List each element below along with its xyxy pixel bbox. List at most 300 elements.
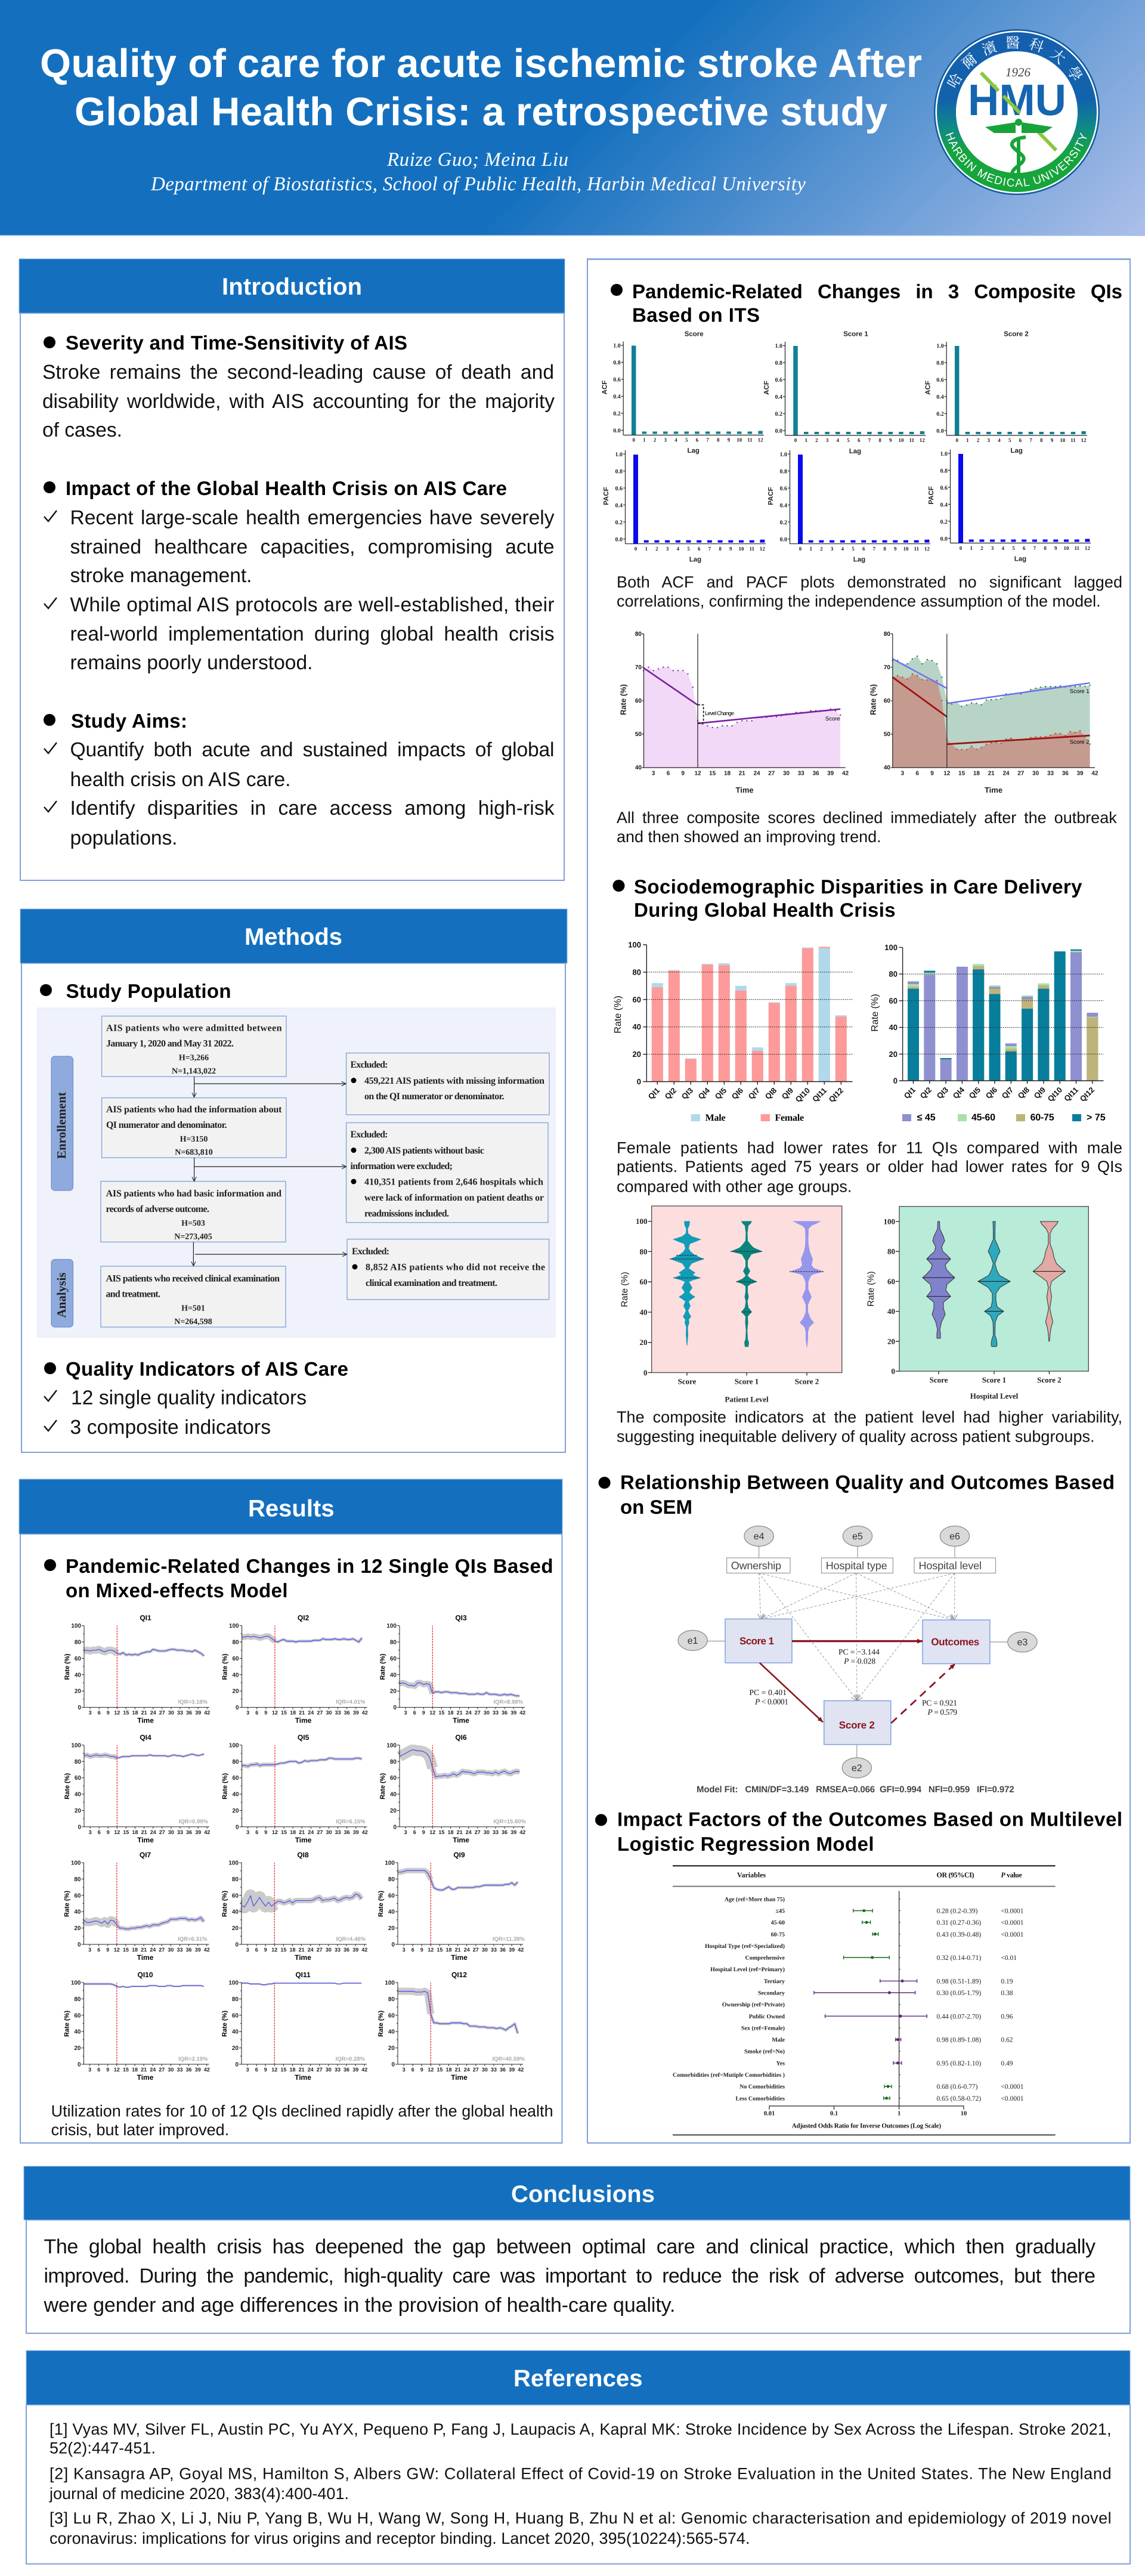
title: Global Health Crisis: a retrospective study bbox=[75, 89, 887, 134]
chart: QI10: 40 bbox=[74, 2029, 81, 2036]
caption: violin bbox=[617, 1408, 1122, 1446]
chart: ACF score 2: 12 bbox=[1081, 437, 1087, 443]
caption: ACF and PACF bbox=[617, 573, 1122, 610]
chart: ITS composite score: Time bbox=[736, 786, 754, 794]
chart: ITS score 1 and score 2: 15 bbox=[958, 771, 965, 777]
chart: QI5 bbox=[222, 1733, 368, 1844]
chart: ITS composite score: 80 bbox=[635, 631, 642, 638]
odds ratio values: 0.31 (0.27-0.36) bbox=[936, 1919, 981, 1926]
chart: QI6: 27 bbox=[475, 1829, 481, 1835]
violin chart: hospital level: Score bbox=[930, 1375, 948, 1384]
chart: QI8: 80 bbox=[232, 1876, 239, 1883]
heading: 12 single QIs: Pandemic-Related Changes in 12 Single QIs Based bbox=[66, 1555, 553, 1577]
flow box 1: H=3,266 bbox=[179, 1054, 209, 1063]
chart: QI8: 33 bbox=[335, 1947, 341, 1953]
path coefficients: P < 0.0001 bbox=[754, 1697, 788, 1706]
text block: references: 52(2):447-451. bbox=[49, 2439, 156, 2457]
chart: ITS score 1 and score 2: 42 bbox=[1091, 771, 1098, 777]
chart: QI2: 6 bbox=[255, 1710, 258, 1716]
chart: ACF score 2: 0.6 bbox=[936, 377, 944, 384]
chart: PACF score 1: 1.0 bbox=[780, 452, 787, 458]
chart: QI5: 80 bbox=[232, 1759, 239, 1765]
chart: PACF score 1: 10 bbox=[903, 546, 909, 552]
chart: ACF score 2: 10 bbox=[1060, 437, 1066, 443]
chart: QI7: 3 bbox=[88, 1947, 91, 1953]
chart: QI8: 27 bbox=[317, 1947, 323, 1953]
chart: QI7: 42 bbox=[204, 1947, 210, 1953]
chart: PACF score: 0.6 bbox=[615, 485, 623, 492]
chart: QI2: 42 bbox=[362, 1710, 368, 1716]
chart: QI9: 20 bbox=[388, 1925, 395, 1932]
chart: QI4: 12 bbox=[114, 1829, 120, 1835]
chart: ACF score 1: Lag bbox=[849, 448, 861, 455]
chart: QI2: 3 bbox=[246, 1710, 249, 1716]
chart: ACF score 1: 1 bbox=[804, 437, 807, 443]
exclusion box 2: 2,300 AIS patients without basic bbox=[364, 1146, 484, 1156]
chart: QI9: Time bbox=[451, 1953, 468, 1962]
violin chart: patient level: Rate (%) bbox=[620, 1272, 630, 1307]
text block: references: [2] Kansagra AP, Goyal MS, Hamilton S, Albers GW: Collateral Effect of Covid-19 on Stroke Evaluation in the United States. The New England bbox=[49, 2465, 1112, 2483]
chart: QI5: 6 bbox=[255, 1829, 258, 1835]
table header bbox=[737, 1870, 1022, 1879]
violin chart: patient level: 0 bbox=[643, 1368, 648, 1377]
chart: QI3: 24 bbox=[466, 1710, 472, 1716]
chart: QI6: 20 bbox=[390, 1808, 397, 1814]
chart: QI6: 12 bbox=[429, 1829, 435, 1835]
variable names: Male bbox=[772, 2037, 785, 2043]
caption: ITS bbox=[617, 809, 1117, 846]
chart: QI7: 12 bbox=[114, 1947, 120, 1953]
chart: QI8: Rate (%) bbox=[221, 1891, 228, 1917]
chart: ITS composite score: 40 bbox=[635, 765, 642, 771]
chart: QI9: 40 bbox=[388, 1909, 395, 1916]
caption: violin: suggesting inequitable delivery of quality across patient subgroups. bbox=[617, 1428, 1095, 1446]
text block: impact: remains poorly understood. bbox=[70, 652, 312, 674]
chart: ITS composite score: 42 bbox=[842, 771, 849, 777]
chart: QI4: 0 bbox=[78, 1824, 81, 1830]
forest axis: 0.01 bbox=[764, 2111, 775, 2117]
text block: severity: Stroke remains the second-leading cause of death and bbox=[42, 361, 554, 384]
chart: QI10: 3 bbox=[88, 2067, 91, 2073]
odds ratio values: 0.30 (0.05-1.79) bbox=[936, 1990, 981, 1997]
chart: QI8: 18 bbox=[289, 1947, 296, 1953]
text block: impact bbox=[44, 477, 555, 674]
exclusion box 2: 410,351 patients from 2,646 hospitals which bbox=[364, 1177, 543, 1188]
icon: university logo: 1926 bbox=[1005, 65, 1030, 79]
chart: ACF score: 7 bbox=[706, 437, 709, 443]
violin chart: patient level: 40 bbox=[639, 1307, 648, 1317]
heading: impact factors: Impact Factors of the Outcomes Based on Multilevel bbox=[617, 1808, 1122, 1830]
text block: study aims: Identify disparities in care access among high-risk bbox=[70, 797, 555, 820]
chart: QI12: 30 bbox=[482, 2067, 488, 2073]
chart: ACF score: 1.0 bbox=[613, 342, 621, 350]
chart: QI6: 60 bbox=[390, 1775, 397, 1782]
violin chart: patient level: 60 bbox=[639, 1278, 648, 1286]
chart: ACF score 1: 12 bbox=[920, 437, 925, 443]
chart: PACF score: 4 bbox=[677, 546, 680, 552]
odds ratio values: 0.65 (0.58-0.72) bbox=[936, 2095, 981, 2102]
chart: QI5: 0 bbox=[236, 1824, 239, 1830]
chart: QI6: QI6 bbox=[455, 1733, 467, 1742]
chart: QI2: 33 bbox=[335, 1710, 341, 1716]
chart: ACF score: 9 bbox=[728, 437, 731, 443]
odds ratio values: 0.43 (0.39-0.48) bbox=[936, 1931, 981, 1938]
chart: QI4: 24 bbox=[150, 1829, 156, 1835]
chart: QI9: Rate (%) bbox=[377, 1891, 385, 1917]
flow arrows bbox=[193, 1077, 347, 1266]
chart: ACF score 1 bbox=[763, 330, 926, 455]
chart: QI6: 100 bbox=[386, 1742, 397, 1749]
p values bbox=[1001, 1907, 1024, 2102]
exclusion box 2: information were excluded; bbox=[351, 1161, 453, 1171]
legend: age: 45-60 bbox=[971, 1113, 995, 1123]
chart: QI8: 100 bbox=[228, 1860, 239, 1867]
chart: QI4 bbox=[64, 1733, 210, 1844]
heading: SEM: Relationship Between Quality and Outcomes Based bbox=[620, 1471, 1115, 1493]
legend: age: ≤ 45 bbox=[917, 1113, 936, 1123]
chart: QI3: Rate (%) bbox=[379, 1653, 386, 1680]
chart: QI10: Rate (%) bbox=[63, 2011, 70, 2037]
odds ratio values: 0.68 (0.6-0.77) bbox=[936, 2083, 978, 2091]
caption: sex and age: patients. Patients aged 75 years or older had lower rates for 9 QIs bbox=[617, 1158, 1122, 1176]
text block: quality indicators: 3 composite indicators bbox=[70, 1417, 271, 1439]
chart: QI7: 80 bbox=[74, 1876, 81, 1883]
diagram: structural equation model: Score 1 bbox=[739, 1635, 774, 1647]
text block: severity: Severity and Time-Sensitivity of AIS bbox=[66, 332, 407, 354]
violin chart: patient level: Score 2 bbox=[795, 1377, 819, 1386]
chart: ACF score 1: 11 bbox=[909, 437, 914, 443]
chart: QI7: 39 bbox=[195, 1947, 201, 1953]
chart: QI9: 80 bbox=[388, 1876, 395, 1883]
icon: university logo: HMU bbox=[968, 75, 1066, 125]
chart: QI12: 15 bbox=[437, 2067, 442, 2073]
chart: PACF score: 0.4 bbox=[615, 503, 623, 509]
chart: QI4: 42 bbox=[204, 1829, 210, 1835]
heading: sociodemographic disparities: Sociodemographic Disparities in Care Delivery bbox=[634, 876, 1082, 898]
confidence intervals bbox=[814, 1909, 927, 2100]
bar chart: rate by age: QI10 bbox=[1046, 1086, 1064, 1103]
chart: PACF score: 0.0 bbox=[615, 537, 623, 543]
p values: <0.0001 bbox=[1001, 1907, 1024, 1915]
bar chart: rate by sex: 80 bbox=[633, 967, 641, 976]
flow box 4 bbox=[101, 1266, 286, 1327]
bar chart: rate by age: QI11 bbox=[1062, 1086, 1080, 1103]
bar chart: rate by sex: QI5 bbox=[713, 1086, 728, 1101]
chart: QI10: 18 bbox=[132, 2067, 138, 2073]
panel: methods bbox=[20, 909, 567, 1452]
chart: ITS composite score: 21 bbox=[739, 771, 745, 777]
chart: QI9: 60 bbox=[388, 1892, 395, 1899]
bar chart: rate by sex: QI2 bbox=[663, 1086, 678, 1101]
chart: ITS score 1 and score 2: 33 bbox=[1047, 771, 1054, 777]
chart: QI5: 21 bbox=[299, 1829, 305, 1835]
chart: PACF score 1 bbox=[768, 450, 930, 564]
chart: QI1: 24 bbox=[150, 1710, 156, 1716]
flow box 4: N=264,598 bbox=[174, 1318, 212, 1326]
chart: QI10: 21 bbox=[141, 2067, 147, 2073]
chart: ACF score: Score bbox=[685, 330, 704, 338]
chart: QI11: 9 bbox=[264, 2067, 267, 2073]
chart: QI7: 21 bbox=[141, 1947, 147, 1953]
chart: QI11: 33 bbox=[335, 2067, 341, 2073]
chart: QI10: 20 bbox=[74, 2045, 81, 2052]
chart: QI10: 6 bbox=[97, 2067, 100, 2073]
chart: PACF score: 5 bbox=[687, 546, 690, 552]
chart: QI6: 30 bbox=[484, 1829, 490, 1835]
heading: introduction: Introduction bbox=[222, 274, 362, 300]
chart: PACF score 1: 0.4 bbox=[780, 503, 787, 509]
chart: QI11: 27 bbox=[317, 2067, 323, 2073]
chart: QI3: 9 bbox=[422, 1710, 425, 1716]
chart: QI5: 36 bbox=[344, 1829, 350, 1835]
text block: impact: real-world implementation during global health crisis bbox=[70, 623, 555, 645]
bar chart: rate by sex: QI7 bbox=[747, 1086, 762, 1101]
chart: QI11 bbox=[221, 1971, 367, 2082]
chart: QI12: 0 bbox=[391, 2061, 395, 2068]
chart: QI12: 100 bbox=[385, 1980, 395, 1986]
chart: QI11: 20 bbox=[232, 2045, 239, 2052]
red arrows bbox=[760, 1641, 955, 1723]
chart: QI9: 24 bbox=[464, 1947, 470, 1953]
exclusion box 2: were lack of information on patient deaths or bbox=[364, 1193, 544, 1203]
chart: QI9 bbox=[377, 1851, 525, 1962]
chart: QI5: 24 bbox=[308, 1829, 314, 1835]
odds ratio values: 0.28 (0.2-0.39) bbox=[936, 1907, 978, 1915]
forest axis: 0.1 bbox=[830, 2111, 838, 2117]
chart: ACF score 2: 0 bbox=[955, 437, 958, 443]
chart: ITS score 1 and score 2: 21 bbox=[988, 771, 995, 777]
bar chart: rate by age: QI9 bbox=[1032, 1086, 1047, 1100]
chart: ACF score 1: 7 bbox=[868, 437, 871, 443]
diagram: structural equation model: Hospital level bbox=[918, 1560, 982, 1572]
chart: PACF score: 0 bbox=[635, 546, 638, 552]
chart: QI2: 12 bbox=[272, 1710, 278, 1716]
variable names: Smoke (ref=No) bbox=[744, 2049, 785, 2055]
variable names: No Comorbidities bbox=[739, 2084, 785, 2091]
chart: QI1: IQR=3.18% bbox=[178, 1699, 208, 1706]
chart: QI3: 27 bbox=[475, 1710, 481, 1716]
chart: QI7: 18 bbox=[132, 1947, 138, 1953]
chart: QI7: 100 bbox=[71, 1860, 81, 1867]
violin: hospital score bbox=[923, 1221, 955, 1338]
bar chart: rate by age bbox=[870, 943, 1106, 1123]
chart: PACF score: 8 bbox=[719, 546, 722, 552]
p values: <0.0001 bbox=[1001, 2095, 1024, 2102]
chart: QI2: Rate (%) bbox=[222, 1653, 229, 1680]
chart: PACF score 2: 0 bbox=[960, 545, 963, 551]
chart: PACF score: 0.8 bbox=[615, 469, 623, 475]
label: analysis bbox=[51, 1260, 73, 1327]
panel: references bbox=[26, 2351, 1130, 2564]
chart: QI2: Time bbox=[295, 1717, 312, 1725]
chart: QI6: 6 bbox=[413, 1829, 416, 1835]
chart: ITS composite score: 12 bbox=[694, 771, 701, 777]
chart: QI9: 100 bbox=[385, 1860, 395, 1867]
chart: QI3: QI3 bbox=[455, 1614, 467, 1622]
chart: ACF score: 0 bbox=[632, 437, 635, 443]
chart: ACF score: 10 bbox=[736, 437, 742, 443]
caption: single QIs bbox=[51, 2102, 553, 2139]
chart: QI4: 40 bbox=[75, 1792, 81, 1798]
chart: ACF score 2: ACF bbox=[925, 381, 932, 395]
chart: PACF score: 7 bbox=[708, 546, 711, 552]
chart: QI6: Rate (%) bbox=[379, 1773, 386, 1799]
chart: QI4: 21 bbox=[141, 1829, 147, 1835]
chart: QI8: 6 bbox=[255, 1947, 258, 1953]
diagram: structural equation model: e1 bbox=[688, 1636, 698, 1646]
chart: ACF score 2: 7 bbox=[1029, 437, 1032, 443]
flow box 1 bbox=[102, 1016, 286, 1077]
chart: ITS composite score: 6 bbox=[667, 771, 670, 777]
chart: PACF score 1: 6 bbox=[862, 546, 865, 552]
diagram: structural equation model: Hospital type bbox=[826, 1560, 887, 1572]
chart: QI11: 24 bbox=[308, 2067, 314, 2073]
chart: QI1: 42 bbox=[204, 1710, 210, 1716]
chart: QI7: 20 bbox=[74, 1925, 81, 1932]
chart: QI8: 21 bbox=[299, 1947, 305, 1953]
legend: age: 60-75 bbox=[1030, 1113, 1054, 1123]
chart: QI1: 80 bbox=[75, 1640, 81, 1646]
chart: ACF score 2: 11 bbox=[1070, 437, 1076, 443]
chart: QI8: 42 bbox=[361, 1947, 367, 1953]
chart: QI10 bbox=[63, 1971, 210, 2082]
chart: PACF score 2: 3 bbox=[991, 545, 994, 551]
chart: QI6: Time bbox=[453, 1836, 469, 1844]
label: enrollment: Enrollement bbox=[54, 1092, 69, 1159]
violin chart: hospital level: 60 bbox=[887, 1277, 895, 1286]
chart: ITS score 1 and score 2: 6 bbox=[915, 771, 919, 777]
chart: QI8: 60 bbox=[232, 1892, 239, 1899]
chart: QI9: 36 bbox=[500, 1947, 506, 1953]
caption: ITS: and then showed an improving trend. bbox=[617, 828, 881, 846]
chart: ACF score: 2 bbox=[654, 437, 657, 443]
chart: QI11: 15 bbox=[280, 2067, 286, 2073]
flow box 2 bbox=[102, 1098, 286, 1158]
text block: references: coronavirus: implications for virus origins and receptor binding. Lancet 2020, 395(10224):565-574. bbox=[49, 2529, 750, 2547]
chart: PACF score: 3 bbox=[666, 546, 669, 552]
chart: QI12: 40 bbox=[388, 2029, 395, 2036]
bar chart: rate by age: QI12 bbox=[1078, 1086, 1096, 1103]
exclusion box 3 bbox=[347, 1239, 549, 1300]
chart: QI5: Time bbox=[295, 1836, 312, 1844]
legend: sex: Male bbox=[705, 1113, 726, 1123]
chart: QI3: 3 bbox=[404, 1710, 407, 1716]
chart: QI3: 36 bbox=[502, 1710, 507, 1716]
chart: PACF score 1: PACF bbox=[768, 487, 775, 505]
bar chart: rate by age: 100 bbox=[884, 943, 898, 952]
chart: QI8: 9 bbox=[264, 1947, 267, 1953]
chart: PACF score 2: 0.0 bbox=[940, 536, 948, 543]
chart: QI6: 33 bbox=[493, 1829, 499, 1835]
path coefficients: PC = 0.401 bbox=[749, 1688, 787, 1697]
diagram: structural equation model: Score 2 bbox=[839, 1720, 875, 1731]
chart: ACF score 1: 0.6 bbox=[775, 377, 782, 384]
diagram: structural equation model: e3 bbox=[1017, 1638, 1028, 1647]
chart: QI10: 24 bbox=[150, 2067, 156, 2073]
chart: QI6: 18 bbox=[447, 1829, 454, 1835]
chart: QI5: Rate (%) bbox=[222, 1773, 229, 1799]
p values: 0.49 bbox=[1001, 2060, 1013, 2067]
chart: PACF score 1: 0.8 bbox=[780, 469, 787, 475]
chart: QI4: 20 bbox=[75, 1808, 81, 1814]
chart: QI3: 0 bbox=[393, 1705, 397, 1711]
heading: impact factors: Logistic Regression Model bbox=[617, 1833, 874, 1855]
p values: <0.0001 bbox=[1001, 2083, 1024, 2091]
chart: QI6: 15 bbox=[438, 1829, 444, 1835]
chart: QI2: 36 bbox=[344, 1710, 350, 1716]
chart: QI12: 80 bbox=[388, 1996, 395, 2003]
table header: Variables bbox=[737, 1870, 766, 1879]
chart: QI8: 0 bbox=[235, 1942, 239, 1948]
text block: study aims bbox=[44, 710, 555, 849]
chart: PACF score 1: 0.6 bbox=[780, 485, 787, 492]
chart: PACF score 1: 3 bbox=[831, 546, 834, 552]
text block: severity bbox=[42, 332, 555, 441]
chart: PACF score: 12 bbox=[760, 546, 765, 552]
flow box 2: QI numerator and denominator. bbox=[106, 1120, 227, 1130]
text block: severity: disability worldwide, with AIS accounting for the majority bbox=[42, 391, 555, 413]
chart: ITS score 1 and score 2: 30 bbox=[1032, 771, 1039, 777]
chart: QI3: 15 bbox=[438, 1710, 444, 1716]
chart: ACF score 2: 2 bbox=[977, 437, 980, 443]
chart: ITS score 1 and score 2: Score 1 bbox=[1070, 688, 1089, 695]
chart: QI2: 20 bbox=[232, 1689, 239, 1695]
chart: QI11: IQR=0.28% bbox=[336, 2056, 366, 2062]
panel: results bbox=[19, 1479, 562, 2143]
chart: ACF score: 12 bbox=[758, 437, 763, 443]
chart: QI5: 33 bbox=[335, 1829, 341, 1835]
caption: sex and age: compared with other age groups. bbox=[617, 1177, 852, 1195]
bar chart: rate by sex: QI12 bbox=[827, 1086, 845, 1104]
chart: ACF score: 0.2 bbox=[613, 410, 621, 418]
chart: QI5: 40 bbox=[232, 1792, 239, 1798]
variable names: 60-75 bbox=[771, 1931, 785, 1938]
text block: impact: While optimal AIS protocols are well-established, their bbox=[70, 594, 555, 616]
chart: QI10: QI10 bbox=[137, 1971, 153, 1979]
chart: QI4: 9 bbox=[107, 1829, 110, 1835]
legend: sex: Female bbox=[775, 1113, 804, 1123]
bar chart: rate by age: 0 bbox=[893, 1076, 898, 1086]
flow box 1: AIS patients who were admitted between bbox=[106, 1023, 282, 1033]
chart: QI3 bbox=[379, 1614, 525, 1725]
chart: ITS score 1 and score 2: 70 bbox=[884, 664, 890, 671]
chart: QI4: QI4 bbox=[140, 1733, 151, 1742]
chart: QI2: 40 bbox=[232, 1672, 239, 1678]
chart: QI7: IQR=6.31% bbox=[178, 1936, 208, 1943]
chart: QI10: 42 bbox=[204, 2067, 210, 2073]
chart: QI6: 40 bbox=[390, 1792, 397, 1798]
authors: Ruize Guo; Meina Liu bbox=[386, 149, 568, 171]
chart: QI5: 60 bbox=[232, 1775, 239, 1782]
variable names: ≤45 bbox=[775, 1908, 785, 1915]
text block: impact: Recent large-scale health emergencies have severely bbox=[70, 507, 555, 529]
variable names: Sex (ref=Female) bbox=[741, 2025, 785, 2031]
chart: ITS composite score: 15 bbox=[709, 771, 716, 777]
chart: QI12: 21 bbox=[455, 2067, 461, 2073]
variable names: Hospital Level (ref=Primary) bbox=[710, 1966, 785, 1973]
chart: ITS score 1 and score 2: 80 bbox=[884, 631, 890, 638]
chart: PACF score: 9 bbox=[729, 546, 732, 552]
heading: sociodemographic disparities: During Global Health Crisis bbox=[634, 899, 896, 921]
chart: ITS score 1 and score 2: 36 bbox=[1062, 771, 1069, 777]
chart: QI9: 6 bbox=[411, 1947, 414, 1953]
chart: QI7: 15 bbox=[123, 1947, 129, 1953]
chart: PACF score 2: 6 bbox=[1023, 545, 1026, 551]
chart: PACF score 2: 12 bbox=[1085, 545, 1090, 551]
text block: study aims: populations. bbox=[70, 827, 178, 849]
chart: ACF score 2: 0.8 bbox=[936, 360, 944, 366]
chart: PACF score 1: 0 bbox=[799, 546, 802, 552]
